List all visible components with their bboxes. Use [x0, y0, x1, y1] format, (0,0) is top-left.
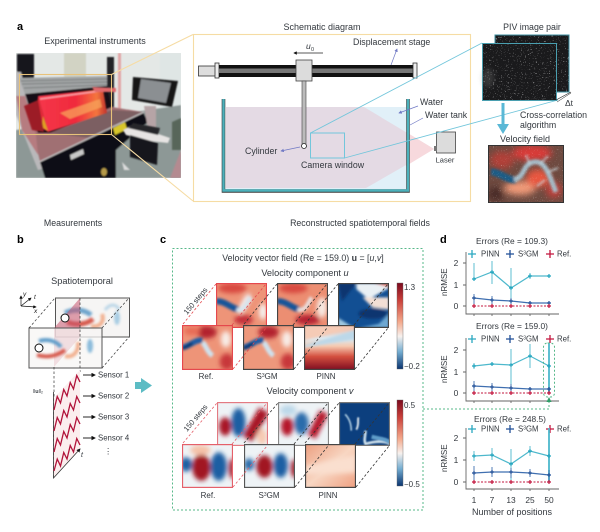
label: cylinder [245, 146, 300, 156]
label: cross-correlation algorithm: algorithm [520, 120, 556, 130]
front flow snapshot [34, 328, 102, 367]
labels: v row: GM [267, 491, 280, 500]
x tick labels: 7 [490, 495, 495, 505]
heatmap: u ref front [182, 325, 233, 370]
sensor signals [54, 376, 80, 471]
labels: v row: PINN [318, 491, 338, 500]
arrow: down to velocity field [497, 103, 509, 134]
schematic diagram [198, 37, 468, 191]
zoom callout box and connector lines [20, 34, 470, 202]
axes icon: y [22, 291, 27, 298]
legend [468, 250, 571, 258]
back flow snapshot [56, 298, 129, 336]
heading: spatiotemporal: Spatiotemporal [51, 276, 113, 286]
legend: S [518, 250, 523, 258]
legend: 3 [523, 250, 526, 256]
labels: u row: PINN [316, 372, 336, 381]
arrow: b to c [135, 378, 152, 393]
PINN series [472, 343, 551, 393]
axes icon [21, 291, 38, 315]
colorbar v: 0.5 [404, 401, 416, 410]
sensor plane [33, 370, 84, 478]
heatmap: u S3GM back [277, 283, 328, 328]
chart: errors Re = 248.5: 0 [454, 477, 459, 487]
water tank walls [224, 99, 408, 191]
label: camera window: Camera window [301, 160, 365, 170]
camera connector lines [310, 43, 558, 158]
x tick labels: 13 [506, 495, 516, 505]
heading: velocity vector field: Velocity vector field (Re = 159.0) u = [u,v] [222, 253, 384, 263]
label: water tank [410, 110, 468, 125]
PINN series [472, 261, 551, 306]
camera window [310, 133, 344, 158]
label: water: Water [420, 97, 443, 107]
panel c: dashed frame [172, 248, 423, 510]
labels: v row: 3 [264, 492, 267, 498]
chart: errors Re = 109.3 [440, 236, 571, 316]
sensor labels: Sensor 4 [98, 434, 130, 442]
colorbar u: −0.2 [404, 362, 420, 371]
dashed depth edges [29, 298, 129, 478]
water tank fill [226, 107, 434, 189]
cylinders [35, 314, 69, 352]
legend: GM [526, 250, 539, 258]
chart: errors Re = 248.5 [440, 414, 571, 517]
delta t marker: Δt [565, 98, 574, 108]
PINN series [472, 428, 551, 482]
connector: c frame to highlight [423, 398, 549, 409]
chart: errors Re = 109.3: 0 [454, 301, 459, 311]
chart: errors Re = 109.3: 1 [454, 280, 459, 290]
sensor labels: Sensor 3 [98, 412, 129, 422]
labels: v row [201, 491, 338, 500]
reference series [472, 480, 551, 484]
heading: experimental instruments: Experimental instruments [44, 36, 146, 46]
laser: Laser [436, 156, 455, 164]
axes icon: t [34, 294, 37, 301]
photo of experimental instruments [16, 53, 181, 178]
PIV back image [495, 35, 569, 92]
heatmap: u PINN back [338, 283, 389, 328]
legend: PINN [481, 334, 500, 344]
sensor labels: Sensor 2 [98, 392, 129, 400]
displacement stage rail [198, 63, 417, 78]
axes icon: x [33, 308, 38, 315]
labels: u row [199, 372, 336, 381]
legend: Ref. [557, 424, 571, 434]
label: 150 steps v: 150 steps [182, 402, 210, 433]
labels: v row: Ref. [201, 491, 215, 500]
heading: reconstructed spatiotemporal fields: Reconstructed spatiotemporal fields [290, 218, 431, 228]
heading: velocity component u: Velocity component u [261, 268, 349, 278]
heatmap: v S3GM back [278, 402, 329, 446]
x axis title: Number of positions [472, 507, 553, 517]
chart: errors Re = 159.0: 1 [454, 367, 459, 377]
x tick labels: 25 [525, 495, 535, 505]
axes [463, 428, 559, 491]
connectors: v stacks dashed [183, 403, 389, 487]
heatmap: u ref back [216, 283, 267, 328]
S3GM series [472, 294, 551, 306]
axes [463, 252, 559, 316]
S3GM series [472, 466, 551, 482]
PIV front image [482, 44, 556, 100]
label: 150 steps u: 150 steps [182, 285, 210, 316]
chart: errors Re = 248.5: 1 [454, 455, 459, 465]
reference series [472, 391, 551, 395]
label: displacement stage [353, 37, 430, 65]
heatmap: v PINN back [339, 402, 390, 446]
heatmap: v S3GM front [244, 444, 295, 488]
sensor plane: t [81, 452, 84, 459]
carriage and cylinder [296, 60, 312, 148]
label: velocity u0 with arrow [294, 41, 323, 53]
panel b: spatiotemporal volume diagram [21, 291, 130, 478]
x tick labels: 50 [544, 495, 554, 505]
legend [468, 424, 571, 434]
chart: errors Re = 159.0: 0 [454, 388, 459, 398]
chart: errors Re = 159.0 [440, 321, 571, 403]
chart: errors Re = 109.3: Errors (Re = 109.3) [476, 236, 548, 246]
panel label b: b [17, 234, 24, 246]
velocity field image [488, 145, 564, 203]
heatmap: u PINN front [304, 325, 355, 370]
labels: v row: S [258, 491, 264, 500]
legend: 3 [523, 426, 526, 432]
label: water tank: Water tank [425, 110, 468, 120]
chart: errors Re = 109.3: nRMSE [440, 268, 449, 296]
colorbar v: −0.5 [404, 480, 420, 489]
labels: u row: S [256, 372, 262, 381]
chart: errors Re = 159.0: nRMSE [440, 355, 449, 383]
heading: velocity field: Velocity field [500, 134, 550, 144]
colorbar u [397, 283, 420, 371]
chart: errors Re = 248.5: 2 [454, 433, 459, 443]
PIV image pair [482, 35, 574, 108]
labels: u row: GM [265, 372, 278, 381]
axes [463, 338, 559, 403]
label: velocity u0 with arrow: u [306, 41, 311, 51]
legend: S [518, 334, 523, 344]
label: water [399, 97, 443, 113]
laser [434, 132, 456, 164]
chart: errors Re = 248.5: nRMSE [440, 444, 449, 472]
red sampling plane upper [54, 298, 80, 367]
panel label c: c [160, 234, 166, 246]
legend: PINN [481, 250, 500, 258]
heading: velocity component v: Velocity component v [267, 386, 355, 396]
label: displacement stage: Displacement stage [353, 37, 430, 47]
legend [468, 334, 571, 344]
heading: schematic diagram: Schematic diagram [283, 22, 361, 32]
label: cross-correlation algorithm: Cross-correlation [520, 110, 587, 120]
heatmap: v PINN front [305, 444, 356, 488]
legend: PINN [481, 424, 500, 434]
heading: PIV image pair: PIV image pair [503, 22, 561, 32]
x tick labels: 1 [472, 495, 477, 505]
chart: errors Re = 159.0: 2 [454, 345, 459, 355]
label: velocity u0 with arrow: 0 [311, 47, 314, 53]
S3GM series [472, 381, 551, 392]
chart: errors Re = 109.3: 2 [454, 258, 459, 268]
colorbar v [397, 400, 420, 489]
reference series [472, 304, 551, 308]
legend: GM [526, 334, 539, 344]
connectors: u stacks dashed [183, 284, 388, 369]
highlight pill [544, 343, 554, 397]
sensor labels [83, 370, 130, 456]
heatmap: u S3GM front [243, 325, 294, 370]
legend: S [518, 424, 523, 434]
x tick labels [472, 495, 554, 505]
label: cylinder: Cylinder [245, 146, 277, 156]
heading: measurements: Measurements [44, 218, 103, 228]
legend: Ref. [557, 250, 571, 258]
legend: GM [526, 424, 539, 434]
sensor labels: ⋮ [104, 447, 112, 456]
chart: errors Re = 159.0: Errors (Re = 159.0) [476, 321, 548, 331]
legend: Ref. [557, 334, 571, 344]
panel label a: a [17, 21, 24, 33]
heatmap: v ref front [182, 444, 233, 488]
labels: u row: Ref. [199, 372, 213, 381]
labels: u row: 3 [262, 373, 265, 379]
chart: errors Re = 248.5: Errors (Re = 248.5) [474, 414, 546, 424]
panel label d: d [440, 234, 447, 246]
sensor plane: ‖u‖₂ [33, 389, 43, 395]
legend: 3 [523, 336, 526, 342]
colorbar u: 1.3 [404, 283, 416, 292]
heatmap: v ref back [217, 402, 268, 446]
sensor labels: Sensor 1 [98, 370, 129, 380]
